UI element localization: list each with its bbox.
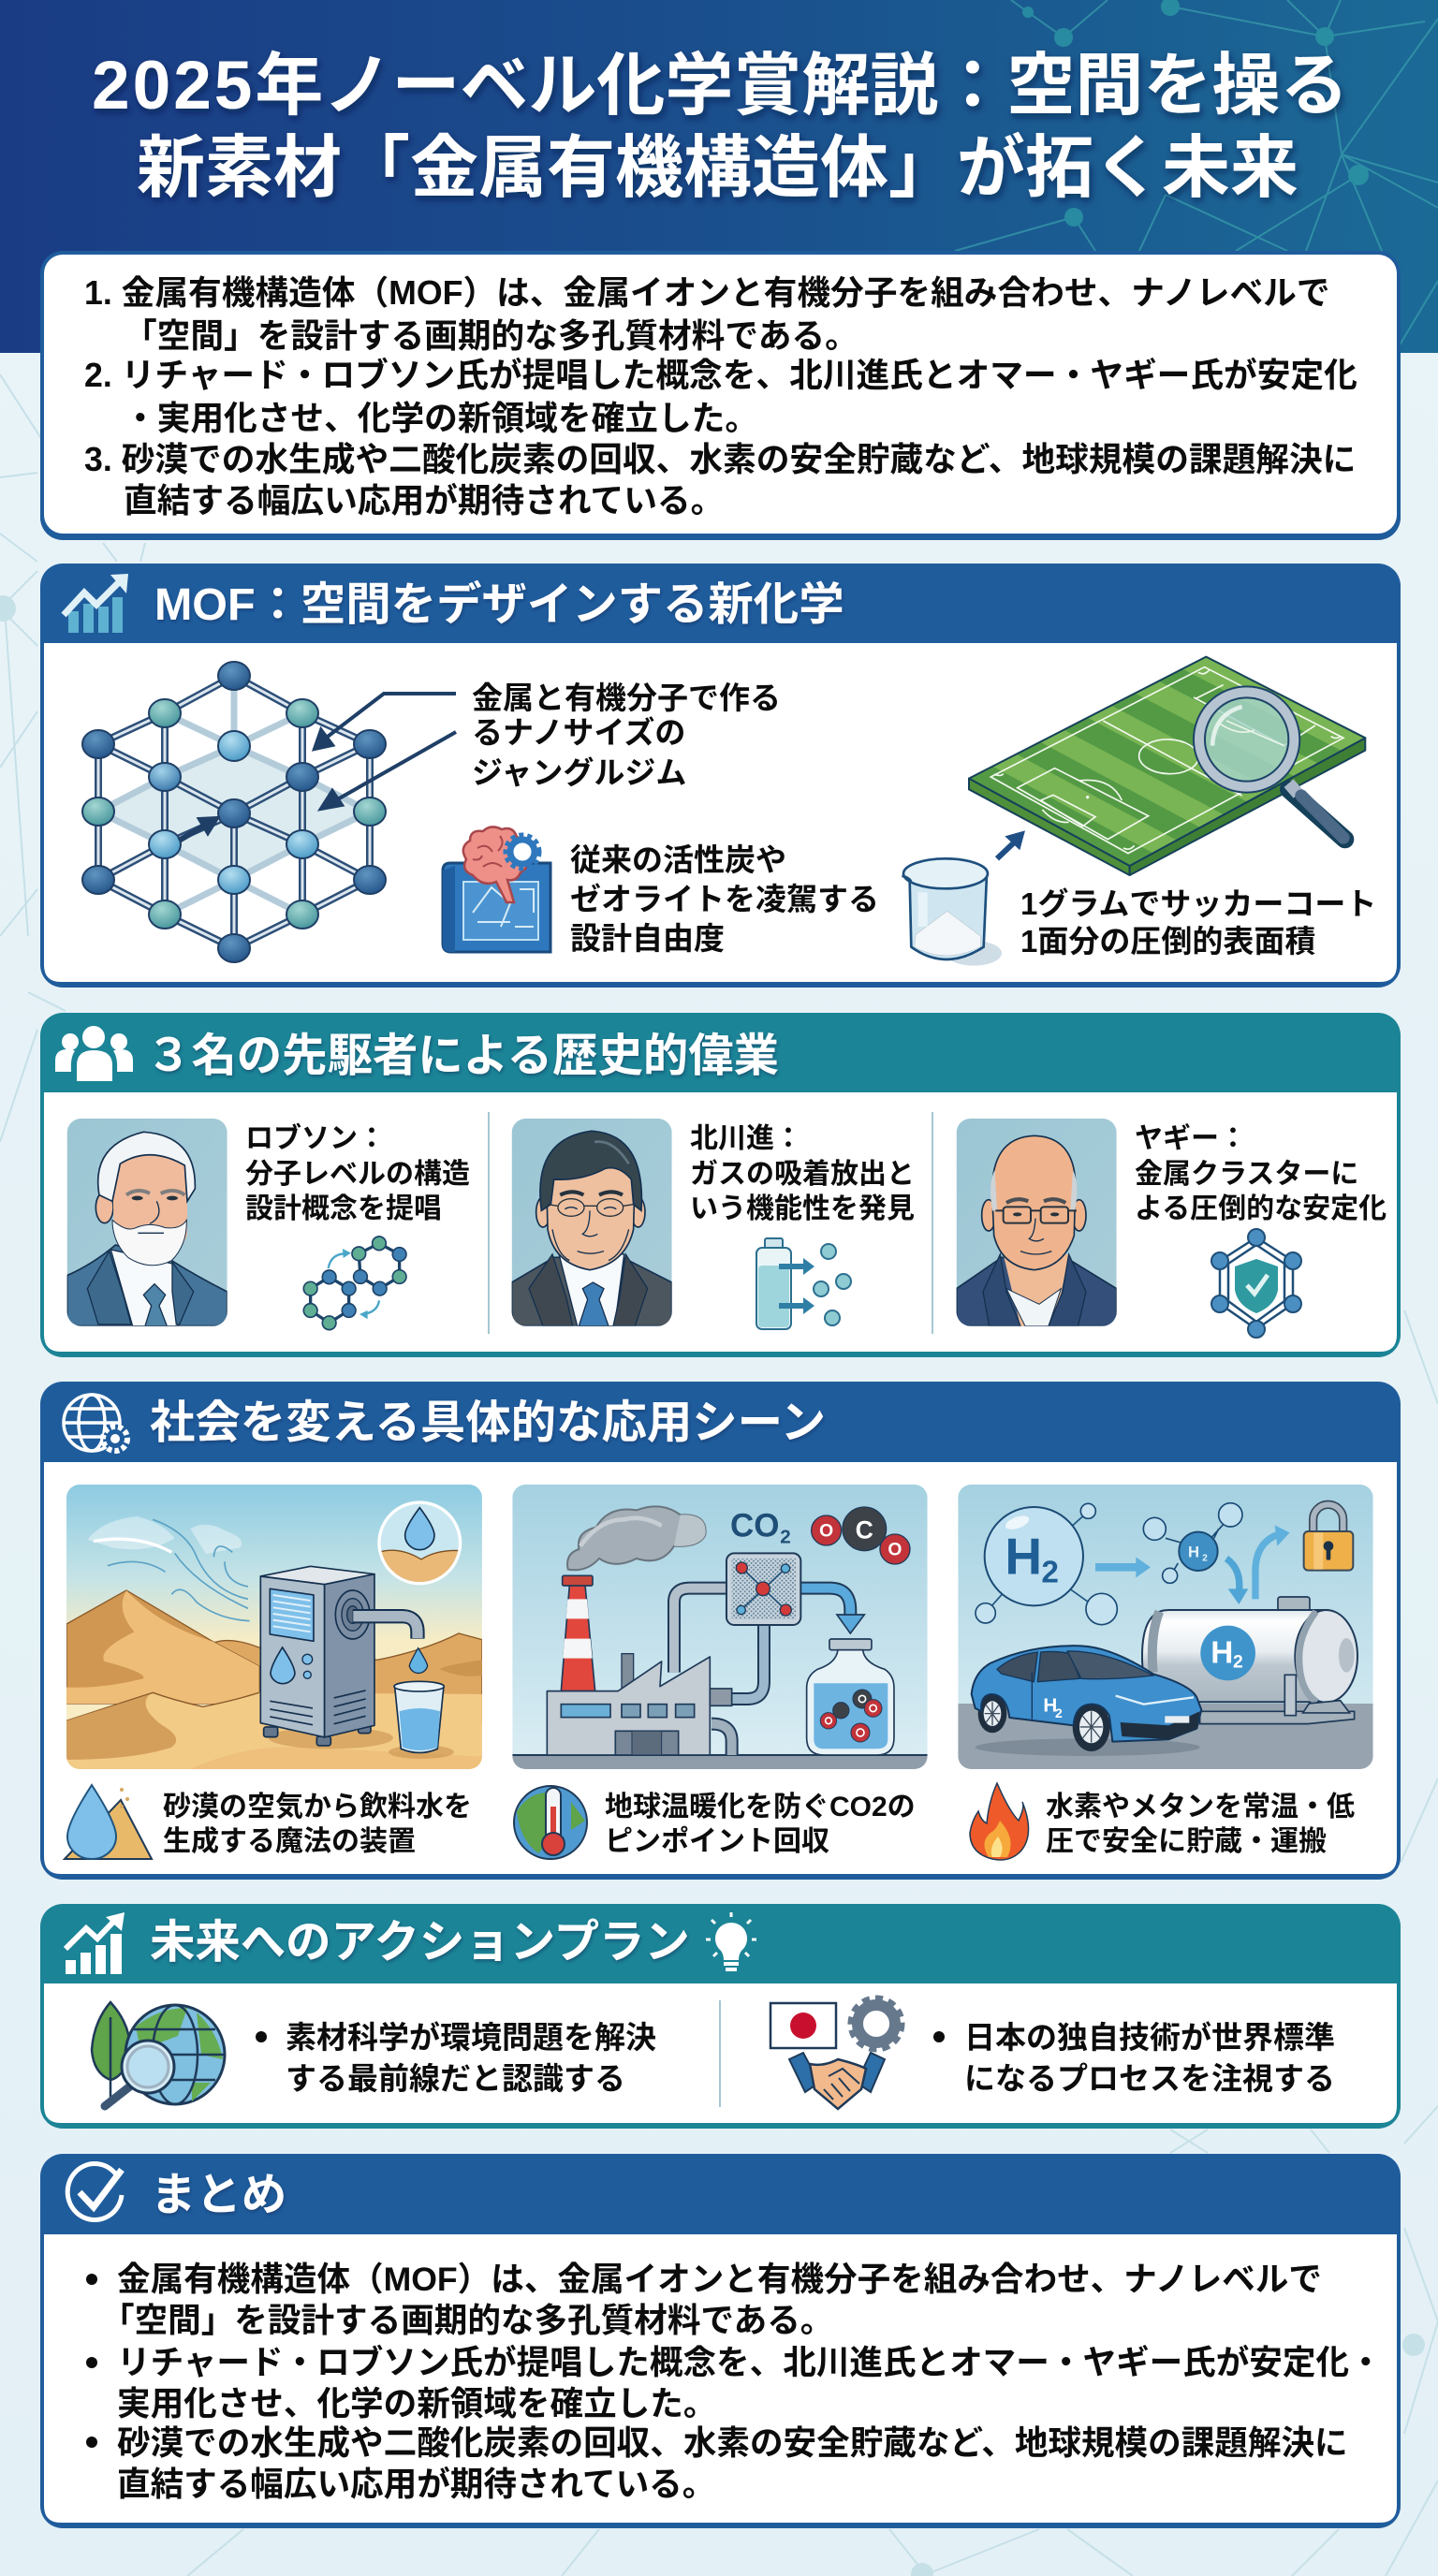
text: desert caption: 砂漠の空気から飲料水を [163, 1792, 472, 1822]
text: action 1: 素材科学が環境問題を解決 [286, 2020, 656, 2055]
icon: growth chart white [66, 1912, 125, 1974]
summary text: 直結する幅広い応用が期待されている。 [117, 2466, 715, 2503]
illustration: hydrogen: H [1005, 1528, 1042, 1586]
callout: jungle gym [472, 681, 781, 790]
text: Robson [245, 1122, 470, 1224]
text: hydrogen caption: 圧で安全に貯蔵・運搬 [1046, 1826, 1327, 1857]
illustration: hydrogen: H [1043, 1694, 1057, 1716]
portrait: Kitagawa [512, 1119, 672, 1326]
icon: brain blueprint [443, 827, 550, 952]
heading: summary: まとめ [151, 2170, 286, 2220]
panel: MOF [40, 564, 1401, 988]
text: design freedom: 従来の活性炭や [570, 842, 786, 877]
illustration: carbon capture [512, 1485, 928, 1769]
illustration: hydrogen: H [1211, 1636, 1233, 1671]
text: design freedom [570, 842, 879, 956]
icon: water drop on sand [65, 1785, 152, 1859]
text: design freedom: 設計自由度 [570, 921, 725, 956]
summary text: リチャード・ロブソン氏が提唱した概念を、北川進氏とオマー・ヤギー氏が安定化・ [117, 2344, 1383, 2381]
illustration: hydrogen: 2 [1041, 1556, 1059, 1590]
text: action 2: 日本の独自技術が世界標準 [964, 2020, 1335, 2055]
summary text [86, 2261, 1383, 2503]
header band [0, 0, 1438, 353]
icon: molecular rings [303, 1237, 406, 1330]
diagram: MOF lattice [82, 662, 386, 962]
heading: pioneers: ３名の先駆者による歴史的偉業 [146, 1031, 779, 1081]
illustration: hydrogen: 2 [1055, 1705, 1063, 1720]
icon: check circle [67, 2164, 122, 2220]
text: hydrogen caption: 水素やメタンを常温・低 [1046, 1792, 1355, 1822]
summary text: 「空間」を設計する画期的な多孔質材料である。 [101, 2302, 833, 2339]
text: Robson: 分子レベルの構造 [245, 1159, 470, 1190]
text: surface area: 1面分の圧倒的表面積 [1020, 924, 1315, 959]
illustration: carbon capture: C [856, 1515, 873, 1544]
key points text: 直結する幅広い応用が期待されている。 [124, 482, 724, 520]
illustration: soccer field [969, 657, 1365, 875]
key points text: ・実用化させ、化学の新領域を確立した。 [124, 400, 758, 437]
illustration: hydrogen: 2 [1202, 1553, 1208, 1563]
illustration: carbon capture: O [819, 1522, 833, 1542]
illustration: carbon capture: CO [730, 1508, 779, 1544]
title: 新素材「金属有機構造体」が拓く未来 [137, 130, 1299, 206]
illustration: carbon capture: 2 [780, 1526, 791, 1547]
text: hydrogen caption [1046, 1792, 1355, 1857]
text: CO2 caption: 地球温暖化を防ぐCO2の [605, 1792, 916, 1822]
divider [719, 2000, 721, 2107]
text: design freedom: ゼオライトを凌駕する [570, 882, 879, 916]
divider [932, 1112, 933, 1334]
text: desert caption: 生成する魔法の装置 [163, 1826, 416, 1857]
summary text: 金属有機構造体（MOF）は、金属イオンと有機分子を組み合わせ、ナノレベルで [117, 2261, 1322, 2298]
text: action 1 [256, 2020, 656, 2096]
text: action 1: する最前線だと認識する [286, 2061, 625, 2096]
callout: jungle gym: るナノサイズの [472, 715, 685, 750]
text: Robson: ロブソン： [245, 1122, 386, 1154]
key points text: 「空間」を設計する画期的な多孔質材料である。 [124, 317, 858, 355]
portrait: Yaghi [957, 1119, 1117, 1326]
panel: key points [40, 251, 1401, 540]
text: Kitagawa [690, 1123, 915, 1224]
title [92, 48, 1348, 206]
icon: lightbulb [706, 1912, 756, 1971]
icon: growth chart [64, 574, 128, 633]
panel: pioneers [40, 1013, 1401, 1357]
illustration: hydrogen: 2 [1233, 1652, 1243, 1672]
title: 2025年ノーベル化学賞解説：空間を操る [92, 48, 1348, 124]
divider [488, 1112, 490, 1334]
text: CO2 caption: ピンポイント回収 [605, 1826, 829, 1857]
panel: action plan [40, 1904, 1401, 2129]
heading: MOF: MOF：空間をデザインする新化学 [154, 579, 844, 630]
illustration: hydrogen [958, 1485, 1373, 1769]
arrow: beaker to field [997, 830, 1025, 858]
key points text: 2. リチャード・ロブソン氏が提唱した概念を、北川進氏とオマー・ヤギー氏が安定化 [84, 357, 1357, 394]
icon: beaker [902, 858, 1002, 966]
text: CO2 caption [605, 1792, 916, 1857]
illustration: desert water [66, 1485, 482, 1769]
illustration: carbon capture: O [888, 1541, 902, 1560]
heading: applications: 社会を変える具体的な応用シーン [150, 1398, 826, 1448]
icon: globe gear [64, 1395, 127, 1451]
key points text: 3. 砂漠での水生成や二酸化炭素の回収、水素の安全貯蔵など、地球規模の課題解決に [84, 441, 1356, 478]
summary text: 実用化させ、化学の新領域を確立した。 [117, 2385, 716, 2422]
panel: summary [40, 2154, 1401, 2528]
icon: Japan flag, gear and handshake [770, 1998, 902, 2109]
text: action 2 [933, 2020, 1335, 2096]
text: Kitagawa: いう機能性を発見 [690, 1193, 915, 1224]
text: Yaghi: よる圧倒的な安定化 [1135, 1193, 1387, 1224]
text: Yaghi: 金属クラスターに [1135, 1159, 1358, 1190]
icon: leaf, globe and magnifier [92, 2002, 225, 2106]
callout: jungle gym: ジャングルジム [472, 755, 686, 790]
icon: gas bottle [756, 1238, 851, 1329]
text: action 2: になるプロセスを注視する [964, 2061, 1335, 2096]
icon: flame [970, 1783, 1029, 1860]
text: Yaghi [1135, 1123, 1387, 1224]
text: Kitagawa: ガスの吸着放出と [690, 1159, 915, 1190]
key points text [84, 274, 1357, 520]
arrow: lattice callout [179, 694, 456, 841]
text: Robson: 設計概念を提唱 [245, 1193, 442, 1224]
panel: applications [40, 1382, 1401, 1880]
heading: action plan: 未来へのアクションプラン [150, 1917, 690, 1968]
text: surface area: 1グラムでサッカーコート [1020, 886, 1376, 921]
icon: stable cluster [1211, 1229, 1301, 1338]
text: desert caption [163, 1792, 472, 1857]
summary text: 砂漠での水生成や二酸化炭素の回収、水素の安全貯蔵など、地球規模の課題解決に [117, 2424, 1348, 2462]
callout: jungle gym: 金属と有機分子で作る [472, 681, 781, 715]
icon: people [55, 1026, 133, 1081]
icon: globe thermometer [514, 1786, 587, 1859]
portrait: Robson [67, 1119, 227, 1326]
text: surface area [1020, 886, 1376, 959]
key points text: 1. 金属有機構造体（MOF）は、金属イオンと有機分子を組み合わせ、ナノレベルで [84, 274, 1330, 312]
illustration: hydrogen: H [1188, 1543, 1199, 1560]
text: Kitagawa: 北川進： [690, 1123, 802, 1154]
text: Yaghi: ヤギー： [1135, 1123, 1247, 1154]
header network pattern [955, 0, 1438, 353]
